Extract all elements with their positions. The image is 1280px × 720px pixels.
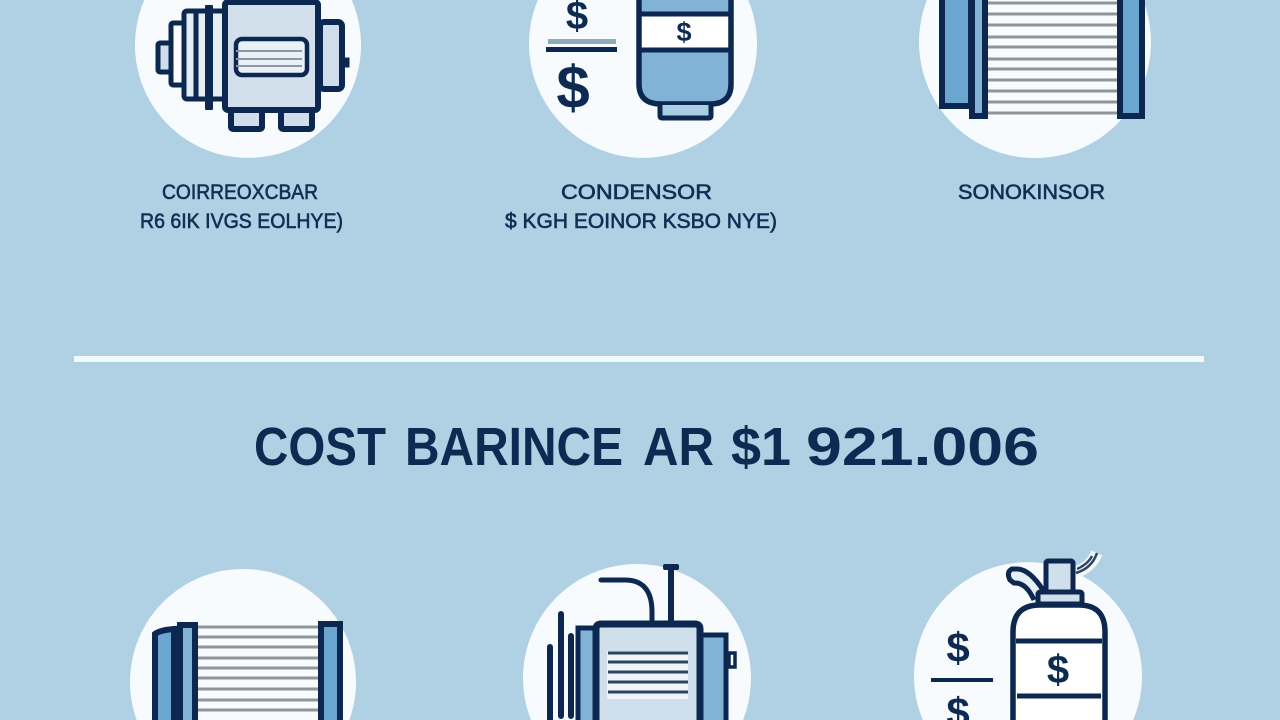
panel: refrigerant bottle xyxy=(914,553,1142,720)
icon: priced bottle: $ xyxy=(946,624,970,671)
icon: priced bottle xyxy=(914,553,1142,720)
icon: priced tank: $ xyxy=(556,54,590,121)
panel: pump xyxy=(523,564,751,720)
icon: compressor xyxy=(135,0,361,158)
icon: priced tank xyxy=(529,0,757,158)
label: condenser: CONDENSOR xyxy=(561,181,712,204)
divider xyxy=(74,356,1204,362)
heading xyxy=(254,417,1039,477)
label: sensor: SONOKINSOR xyxy=(958,181,1105,204)
icon: priced bottle: $ xyxy=(1047,648,1069,692)
icon: radiator coil lower xyxy=(130,569,356,720)
label: condenser: $ KGH EOINOR KSBO NYE) xyxy=(505,210,777,233)
panel: condenser xyxy=(505,0,777,233)
heading: AR xyxy=(643,417,714,477)
heading: $1 xyxy=(731,417,791,477)
label: compressor: R6 6IK IVGS EOLHYE) xyxy=(140,210,343,233)
panel: sensor xyxy=(919,0,1151,204)
label: compressor: COIRREOXCBAR xyxy=(162,181,318,204)
panel: compressor xyxy=(135,0,361,233)
heading: 921.006 xyxy=(806,417,1039,477)
icon: priced tank: $ xyxy=(676,17,692,47)
label: compressor xyxy=(140,181,343,233)
icon: radiator coil xyxy=(919,0,1151,158)
heading: COST xyxy=(254,417,386,477)
heading: BARINCE xyxy=(405,417,623,477)
icon: compressor unit xyxy=(523,564,751,720)
panel: radiator xyxy=(130,569,356,720)
label: condenser xyxy=(505,181,777,233)
